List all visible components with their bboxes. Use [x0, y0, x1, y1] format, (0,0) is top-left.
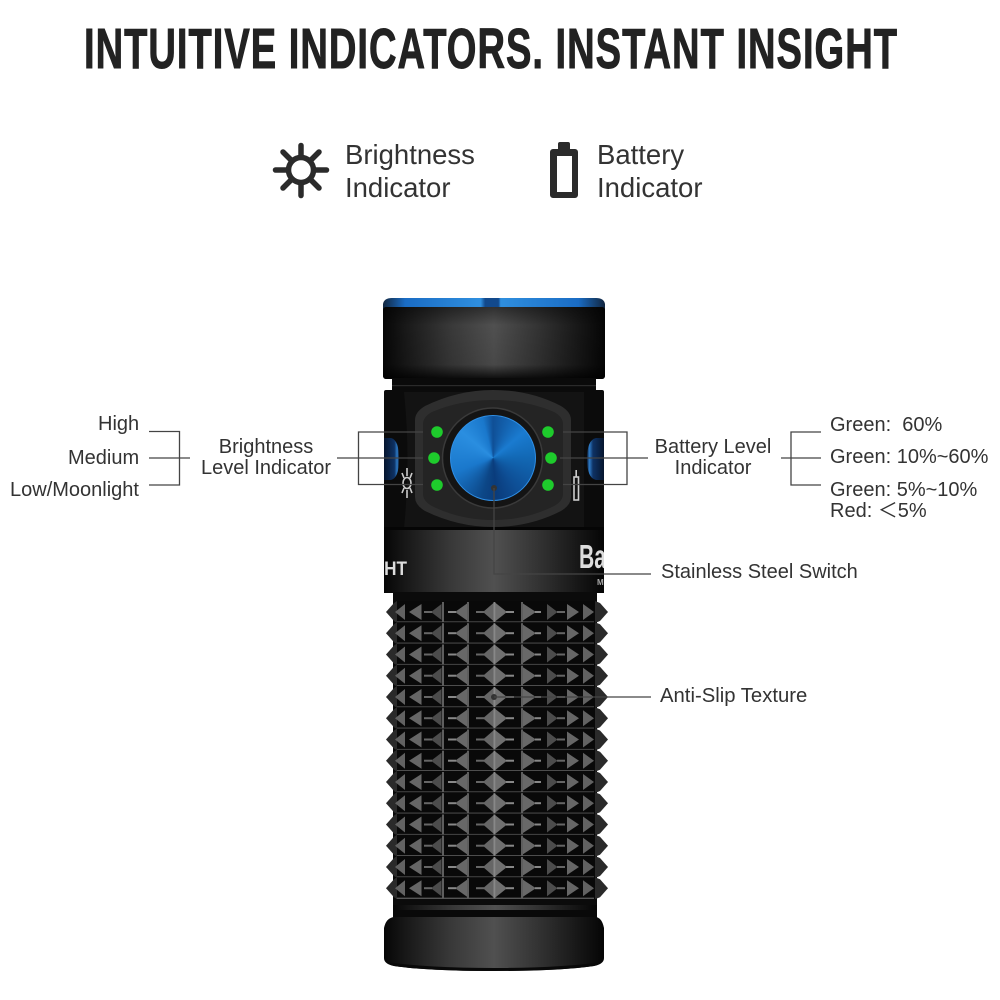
- label: stainless steel switch: Stainless Steel Switch: [661, 561, 858, 583]
- callout line: switch: [491, 485, 651, 574]
- labels: brightness levels: High: [98, 413, 139, 435]
- icon: engraved battery: [574, 470, 578, 500]
- flashlight: [366, 298, 609, 971]
- brand text: IGHT: [366, 559, 407, 580]
- label: battery level indicator: Battery Level: [655, 436, 771, 458]
- callout line: texture: [491, 694, 651, 700]
- label: brightness level indicator: Level Indicator: [201, 457, 331, 479]
- labels: battery levels: [830, 414, 989, 522]
- switch button: [450, 415, 536, 501]
- tail: [393, 899, 597, 917]
- labels: battery levels: Green: 5%~10%: [830, 479, 978, 501]
- ring below switch: [384, 530, 604, 593]
- switch side notches: [384, 438, 399, 480]
- battery label: Battery: [597, 139, 684, 170]
- head: [383, 307, 605, 379]
- label: brightness level indicator: Brightness: [219, 436, 313, 458]
- brightness LEDs: [428, 426, 443, 491]
- grip neck: [393, 592, 597, 604]
- label: anti-slip texture: Anti-Slip Texture: [660, 685, 807, 707]
- battery LEDs: [542, 426, 557, 491]
- labels: battery levels: Green: 10%~60%: [830, 446, 989, 468]
- blue bezel: [383, 298, 605, 312]
- legend: brightness indicator: Indicator: [345, 172, 450, 203]
- grip texture: [386, 601, 608, 900]
- legend: battery indicator: Indicator: [597, 172, 702, 203]
- brand text: M5: [597, 578, 609, 587]
- legend: brightness indicator: [276, 139, 475, 203]
- neck: [392, 378, 596, 392]
- label: brightness level indicator: [201, 436, 331, 479]
- icon: engraved sun: [402, 468, 412, 498]
- legend: battery indicator: [550, 139, 702, 203]
- brand text: [385, 545, 604, 585]
- icon: sun: [276, 146, 326, 196]
- labels: brightness levels: Low/Moonlight: [10, 479, 139, 501]
- brightness label: Brightness: [345, 139, 475, 170]
- labels: battery levels: Green: 60%: [830, 414, 943, 436]
- labels: battery levels: Red: ＜5%: [830, 500, 927, 522]
- callout lines: battery: [560, 432, 821, 485]
- labels: brightness levels: Medium: [68, 447, 139, 469]
- label: battery level indicator: Indicator: [675, 457, 752, 479]
- labels: brightness levels: [10, 413, 139, 501]
- callout lines: brightness: [149, 432, 423, 485]
- switch housing: [384, 390, 604, 530]
- switch panel: [415, 390, 571, 527]
- brand text: Ba: [579, 538, 606, 575]
- icon: battery: [550, 142, 578, 198]
- label: battery level indicator: [655, 436, 771, 479]
